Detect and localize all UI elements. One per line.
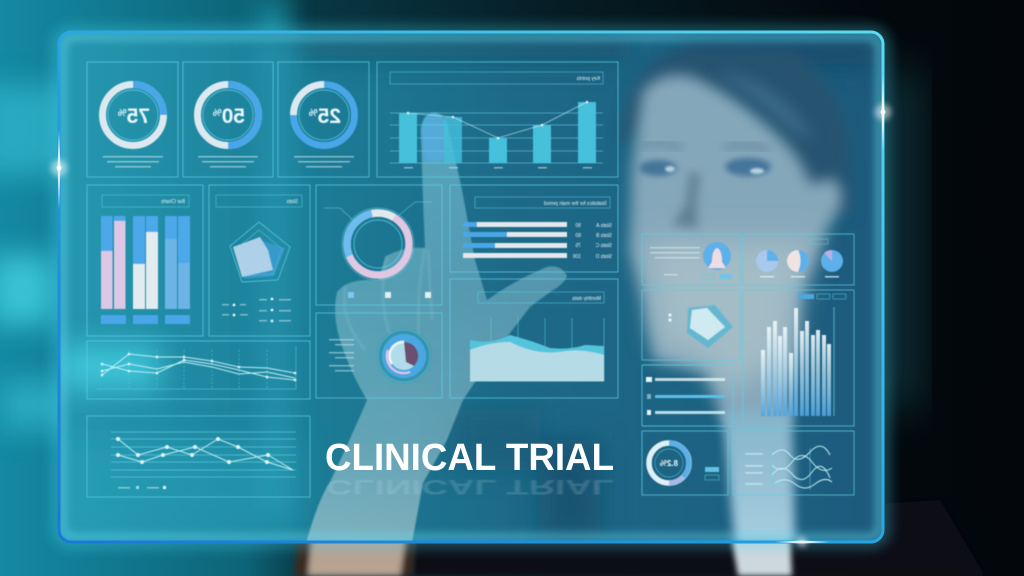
hand through the glass [306, 113, 567, 543]
woman: hair [620, 50, 852, 215]
panel: small radar [642, 290, 740, 360]
right edge haze [884, 70, 914, 410]
panel: key points: Key points [576, 76, 600, 82]
dashboard [87, 62, 854, 497]
panel: statistics: Stats B [595, 233, 612, 239]
arm below the screen [294, 535, 416, 576]
panel: statistics [450, 185, 618, 272]
panel: 50 percent [183, 62, 273, 177]
panel: statistics: 90 [575, 223, 581, 229]
woman: jacket below the screen [412, 500, 985, 576]
panel: ring gauge [642, 431, 728, 495]
woman: blouse below the screen [730, 530, 792, 576]
glass panel [58, 32, 884, 542]
woman: face and neck [630, 75, 842, 424]
woman: hair sheen [729, 74, 808, 136]
panel: ring gauge: 8.2% [660, 459, 678, 468]
panel: monthly data: Monthly data [572, 296, 601, 302]
panel: statistics: Stats C [595, 243, 612, 249]
panel border [59, 32, 883, 542]
fingertip glow [421, 113, 447, 162]
panel outer glow [58, 32, 884, 542]
panel: pies [743, 234, 854, 285]
value: 25 [318, 105, 341, 128]
value: 75 [127, 105, 150, 128]
panel: bar charts: Bar Charts [161, 199, 185, 205]
panel: statistics: 75 [575, 243, 581, 249]
panel: monthly data [450, 279, 618, 398]
woman: eye highlights [665, 166, 764, 174]
panel light patches [60, 36, 880, 545]
panel: statistics: Statistics for the main period [544, 201, 607, 207]
panel inner halo [64, 38, 878, 536]
woman: lower face [645, 240, 815, 395]
panel: peak line chart [87, 416, 310, 497]
panel: statistics: Stats A [595, 223, 612, 229]
panel: stats radar [209, 185, 310, 336]
panel: statistics: Stats D [595, 254, 612, 260]
background lights [0, 0, 284, 430]
panel: column chart [743, 290, 854, 426]
woman: blouse behind glass [722, 410, 795, 545]
panel: waves [733, 431, 854, 495]
hand and arm [306, 113, 567, 543]
panel: 75 percent [87, 62, 178, 177]
panel: stats radar: Stats [286, 199, 298, 205]
panel: profile [642, 234, 740, 285]
panel: statistics: 100 [572, 254, 581, 260]
woman: brows and nose shade [640, 143, 770, 150]
panel: key points [377, 62, 618, 177]
value: % [309, 108, 318, 119]
panel: donut chart [316, 185, 442, 305]
light flare: right [875, 75, 891, 150]
woman behind the screen [620, 50, 852, 545]
panel: 25 percent [278, 62, 369, 177]
woman: eyes [639, 158, 771, 176]
value: % [118, 108, 127, 119]
light flare: bottom [775, 537, 830, 547]
panel: line chart [87, 341, 310, 399]
panel: progress rows [642, 365, 733, 426]
panel: gauge list [316, 313, 442, 398]
ring gauge [377, 329, 431, 383]
title: CLINICAL TRIAL [325, 437, 614, 479]
value: % [213, 108, 222, 119]
finger creases [344, 248, 432, 350]
panel: statistics: 60 [575, 233, 581, 239]
panel: bar charts [87, 185, 203, 336]
value: 50 [222, 105, 245, 128]
title reflection: CLINICAL TRIAL [326, 475, 614, 498]
light flare: left [51, 130, 67, 210]
